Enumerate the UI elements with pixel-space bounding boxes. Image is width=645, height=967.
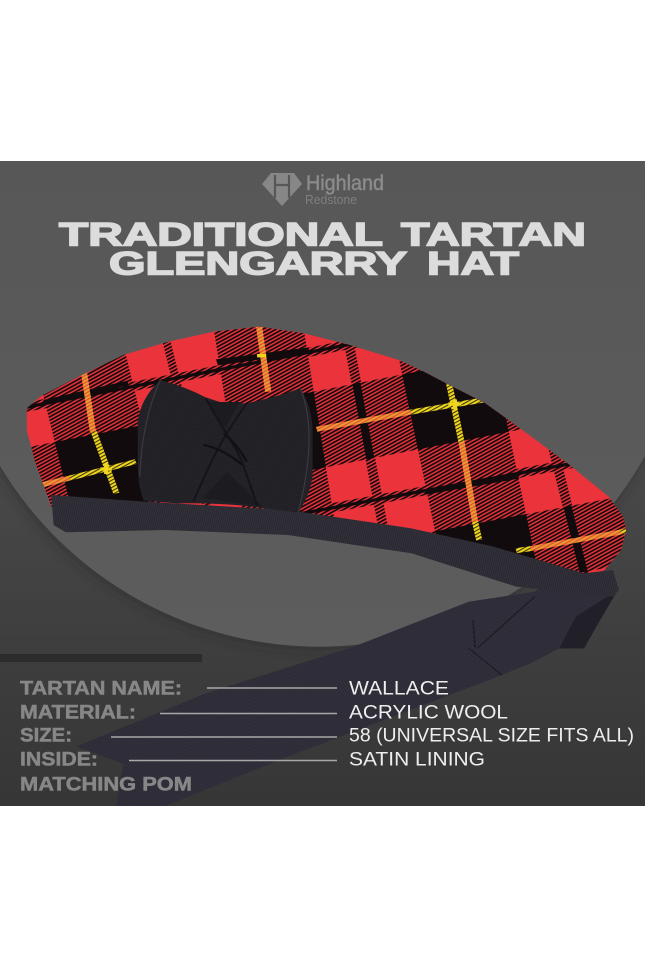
bow	[138, 380, 313, 513]
hat band	[51, 495, 619, 597]
divider bar	[0, 654, 202, 662]
dark tail ribbon	[76, 560, 618, 806]
title	[59, 216, 586, 282]
row: inside: SATIN LINING	[349, 750, 485, 770]
title: TARTAN	[401, 216, 586, 252]
row: inside: INSIDE:	[20, 750, 98, 770]
row: inside	[20, 750, 485, 770]
row: material	[20, 702, 508, 724]
tartan crown	[26, 326, 626, 574]
hat illustration	[26, 326, 626, 596]
row: matching pom: MATCHING POM	[20, 774, 192, 796]
row: material: ACRYLIC WOOL	[349, 702, 508, 724]
title: GLENGARRY	[109, 246, 407, 282]
icon: diamond logo	[262, 173, 302, 206]
logo wordmark: Highland	[306, 172, 384, 195]
row: tartan name: TARTAN NAME:	[20, 678, 182, 700]
row: tartan name	[20, 678, 449, 700]
row: size	[20, 726, 634, 746]
title: TRADITIONAL	[59, 216, 383, 252]
logo subtitle: Redstone	[305, 193, 357, 207]
row: material: MATERIAL:	[20, 702, 136, 724]
title: HAT	[427, 246, 519, 282]
specification table	[20, 678, 634, 796]
row: size: SIZE:	[20, 726, 72, 746]
logo: Highland Redstone	[262, 172, 384, 207]
row: tartan name: WALLACE	[349, 678, 449, 700]
row: size: 58 (UNIVERSAL SIZE FITS ALL)	[349, 726, 634, 746]
